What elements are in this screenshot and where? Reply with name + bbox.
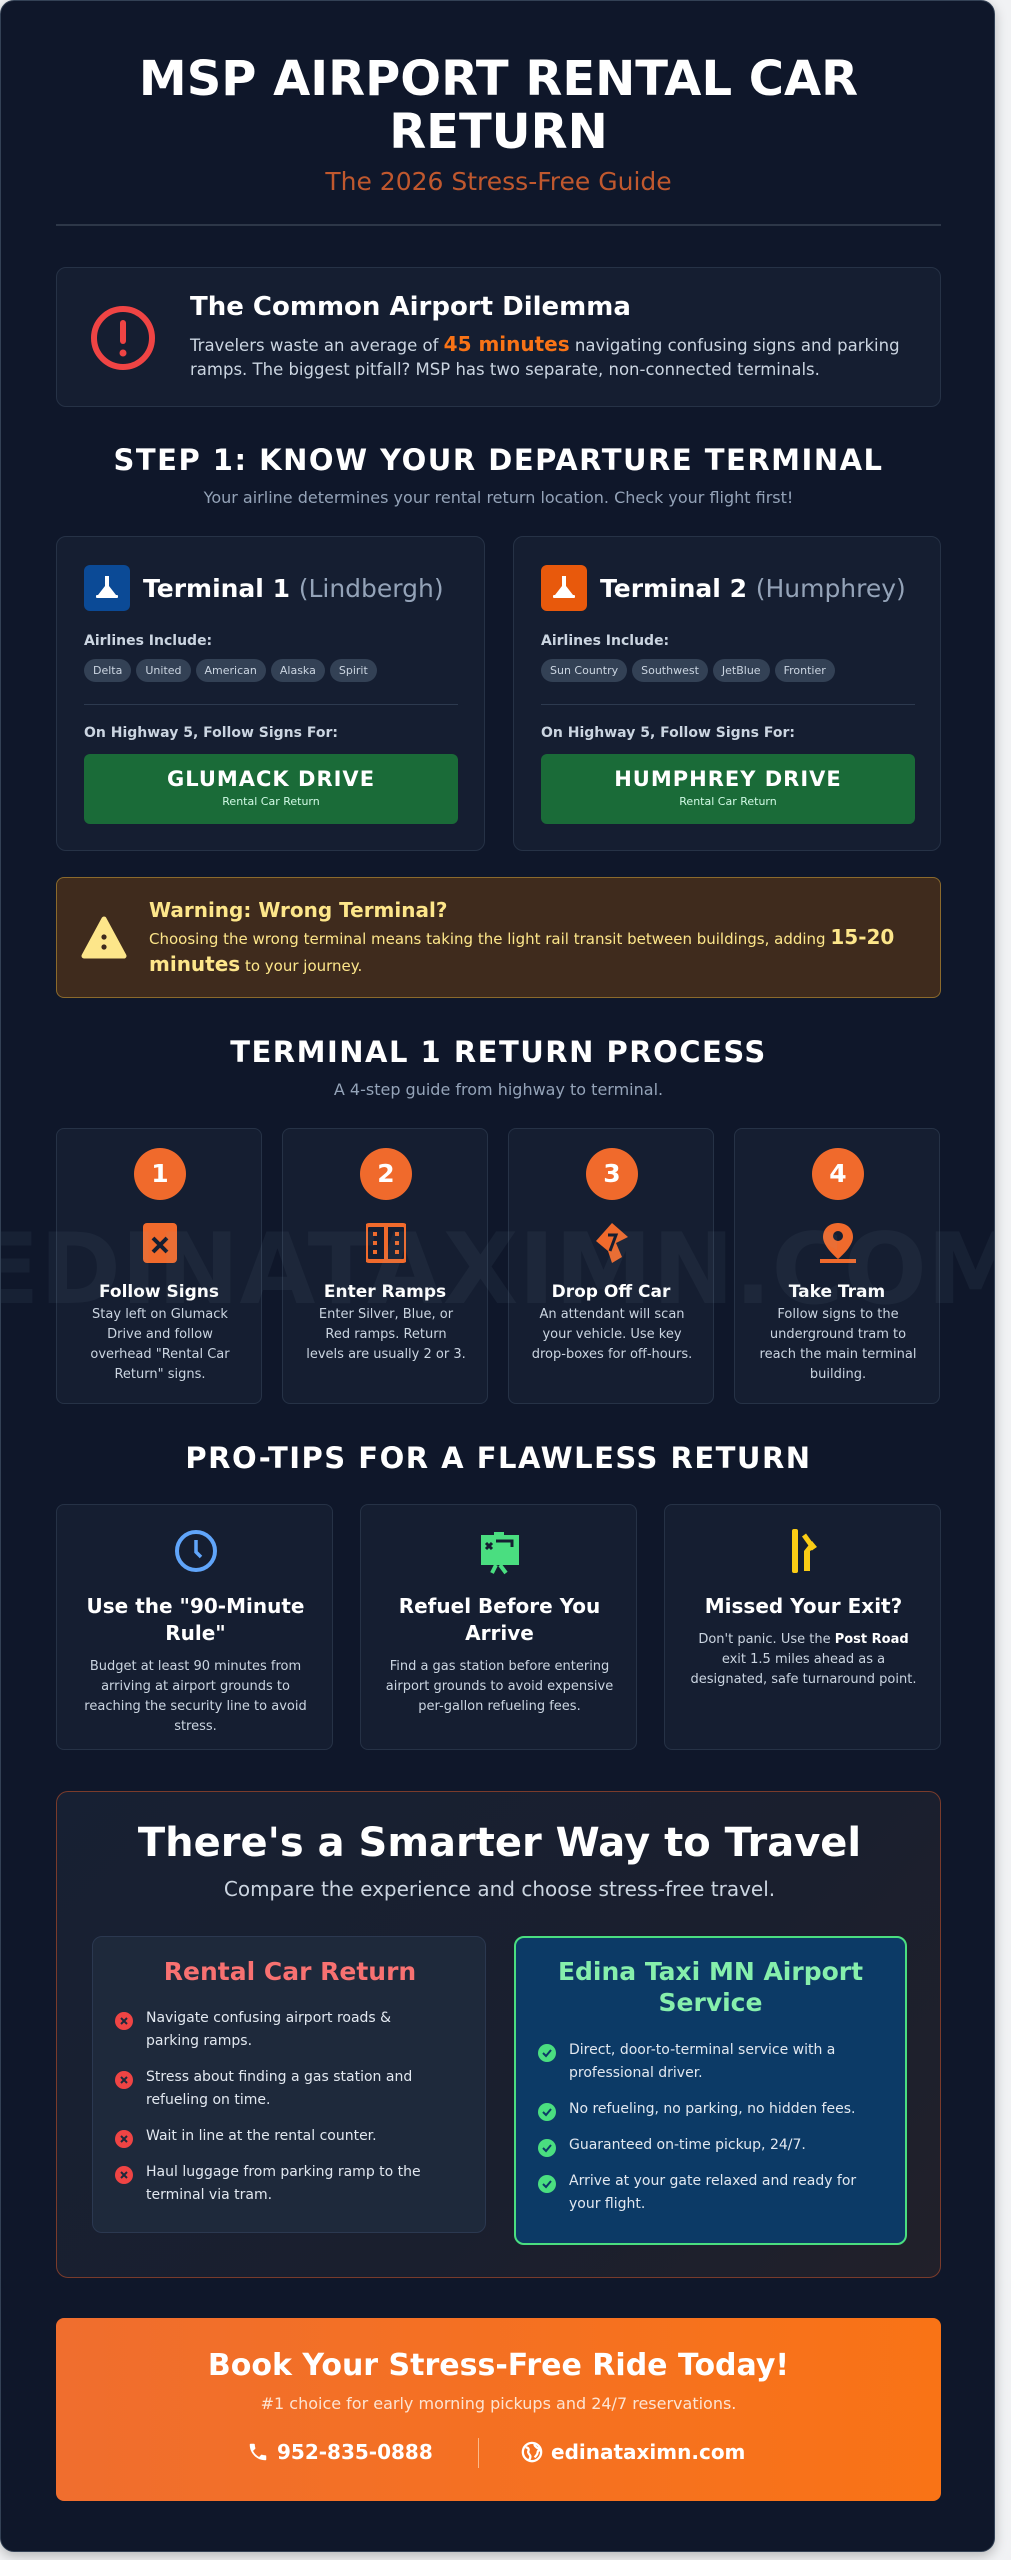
- subheading step 1: Your airline determines your rental return location. Check your flight first!: [204, 488, 793, 507]
- step 4: [734, 1128, 940, 1404]
- dilemma text: Travelers waste an average of 45 minutes navigating confusing signs and parking ramps. The biggest pitfall? MSP has two separate, non-connected terminals.: [190, 332, 900, 379]
- icon: location pin: [820, 1223, 856, 1263]
- airline pills: Spirit: [339, 664, 368, 677]
- step 3: [508, 1128, 714, 1404]
- subtitle: The 2026 Stress-Free Guide: [325, 167, 672, 196]
- sign: glumack: [84, 754, 458, 824]
- column: rental car: [92, 1936, 486, 2233]
- tip 3: Don't panic. Use the Post Road exit 1.5 miles ahead as a designated, safe turnaround point.: [690, 1632, 916, 1687]
- warning text: Choosing the wrong terminal means taking the light rail transit between buildings, adding 15-20 minutes to your journey.: [149, 925, 894, 976]
- step 2: 2: [377, 1159, 395, 1188]
- panel: comparison: [56, 1791, 941, 2278]
- step 1: [56, 1128, 262, 1404]
- cta title: Book Your Stress-Free Ride Today!: [208, 2348, 789, 2383]
- step 3: Drop Off Car: [552, 1282, 670, 1302]
- step 4: Follow signs to the underground tram to reach the main terminal building.: [760, 1307, 916, 1382]
- subheading process: A 4-step guide from highway to terminal.: [334, 1080, 663, 1099]
- cta subtitle: #1 choice for early morning pickups and 24/7 reservations.: [261, 2394, 736, 2413]
- dilemma text: The Common Airport Dilemma: [190, 292, 631, 322]
- step 3: 3: [603, 1159, 621, 1188]
- airline pills: [541, 659, 835, 682]
- panel: call to action: [56, 2318, 941, 2501]
- sign: humphrey: Rental Car Return: [679, 795, 777, 808]
- terminal 2 title: Terminal 2 (Humphrey): [600, 574, 906, 603]
- terminal 1 title: Terminal 1 (Lindbergh): [143, 574, 444, 603]
- icon: gas: [481, 1532, 519, 1574]
- panel: terminal 2: [513, 536, 941, 851]
- warning text: [149, 898, 894, 976]
- icon: terminal 1: [84, 565, 130, 611]
- list pros: Direct, door-to-terminal service with a professional driver.: [569, 2042, 835, 2081]
- comparison subtitle: Compare the experience and choose stress-free travel.: [224, 1877, 775, 1901]
- comparison title: There's a Smarter Way to Travel: [138, 1820, 861, 1866]
- airline pills: Delta: [93, 664, 122, 677]
- step 1: 1: [151, 1159, 169, 1188]
- airline pills: Sun Country: [550, 664, 618, 677]
- list cons: [115, 2010, 421, 2203]
- list cons: Navigate confusing airport roads & parking ramps.: [146, 2010, 391, 2049]
- panel: terminal 2: Airlines Include:: [541, 633, 669, 649]
- step 3: An attendant will scan your vehicle. Use key drop-boxes for off-hours.: [532, 1307, 692, 1362]
- list pros: No refueling, no parking, no hidden fees.: [569, 2101, 855, 2117]
- airline pills: Frontier: [784, 664, 826, 677]
- column: taxi: Service: [659, 1988, 762, 2017]
- sign: glumack: GLUMACK DRIVE: [167, 767, 375, 791]
- callout: warning: [56, 877, 941, 998]
- tip 1: Budget at least 90 minutes from arriving at airport grounds to reaching the security line to avoid stress.: [84, 1659, 307, 1734]
- dilemma text: [190, 292, 900, 379]
- title: [139, 51, 858, 160]
- airline pills: JetBlue: [722, 664, 761, 677]
- warning text: Warning: Wrong Terminal?: [149, 898, 447, 922]
- panel: terminal 1: On Highway 5, Follow Signs For:: [84, 725, 338, 741]
- column: rental car: Rental Car Return: [164, 1957, 416, 1986]
- list pros: [538, 2042, 856, 2212]
- step 1: Follow Signs: [99, 1282, 219, 1302]
- icon: terminal 2: [541, 565, 587, 611]
- sign: glumack: Rental Car Return: [222, 795, 320, 808]
- icon: ramps: [366, 1223, 406, 1263]
- tip 1: [56, 1504, 333, 1750]
- tip 3: Missed Your Exit?: [705, 1594, 902, 1618]
- airline pills: [84, 659, 377, 682]
- step 4: 4: [829, 1159, 847, 1188]
- panel: terminal 1: [56, 536, 485, 851]
- icon: clock: [175, 1530, 217, 1572]
- icon: warning triangle: [82, 916, 126, 958]
- airline pills: United: [145, 664, 182, 677]
- step 2: [282, 1128, 488, 1404]
- list cons: Stress about finding a gas station and refueling on time.: [146, 2069, 412, 2108]
- contact: website: edinataximn.com: [551, 2440, 745, 2464]
- title: RETURN: [389, 104, 608, 160]
- icon: exit arrow: [792, 1529, 817, 1573]
- tip 2: Refuel Before You Arrive: [399, 1594, 600, 1645]
- list pros: Arrive at your gate relaxed and ready for your flight.: [569, 2173, 856, 2212]
- tip 1: Use the "90-Minute Rule": [87, 1594, 304, 1645]
- tip 2: [360, 1504, 637, 1750]
- sign: humphrey: HUMPHREY DRIVE: [614, 767, 842, 791]
- tip 3: [664, 1504, 941, 1750]
- heading: step 1: STEP 1: KNOW YOUR DEPARTURE TERMINAL: [113, 443, 884, 477]
- panel: dilemma: [56, 267, 941, 407]
- heading: pro tips: PRO-TIPS FOR A FLAWLESS RETURN: [185, 1441, 812, 1475]
- list pros: Guaranteed on-time pickup, 24/7.: [569, 2137, 806, 2153]
- step 1: Stay left on Glumack Drive and follow overhead "Rental Car Return" signs.: [90, 1307, 230, 1382]
- airline pills: American: [205, 664, 257, 677]
- step 4: Take Tram: [789, 1282, 885, 1302]
- panel: terminal 2: On Highway 5, Follow Signs For:: [541, 725, 795, 741]
- step 2: Enter Ramps: [324, 1282, 446, 1302]
- icon: alert circle: [91, 306, 155, 370]
- sign: humphrey: [541, 754, 915, 824]
- airline pills: Southwest: [641, 664, 699, 677]
- icon: sign: [143, 1223, 177, 1263]
- heading: terminal 1 process: TERMINAL 1 RETURN PROCESS: [230, 1035, 767, 1069]
- contact: phone: 952-835-0888: [277, 2440, 433, 2464]
- step 2: Enter Silver, Blue, or Red ramps. Return levels are usually 2 or 3.: [306, 1307, 466, 1362]
- airline pills: Alaska: [280, 664, 316, 677]
- tip 2: Find a gas station before entering airport grounds to avoid expensive per-gallon refueling fees.: [386, 1659, 613, 1714]
- icon: drop off: [596, 1223, 628, 1263]
- title: MSP AIRPORT RENTAL CAR: [139, 51, 858, 107]
- list cons: Wait in line at the rental counter.: [146, 2128, 377, 2144]
- column: taxi: [514, 1936, 907, 2245]
- panel: terminal 1: Airlines Include:: [84, 633, 212, 649]
- column: taxi: Edina Taxi MN Airport: [558, 1957, 863, 1986]
- list cons: Haul luggage from parking ramp to the terminal via tram.: [146, 2164, 421, 2203]
